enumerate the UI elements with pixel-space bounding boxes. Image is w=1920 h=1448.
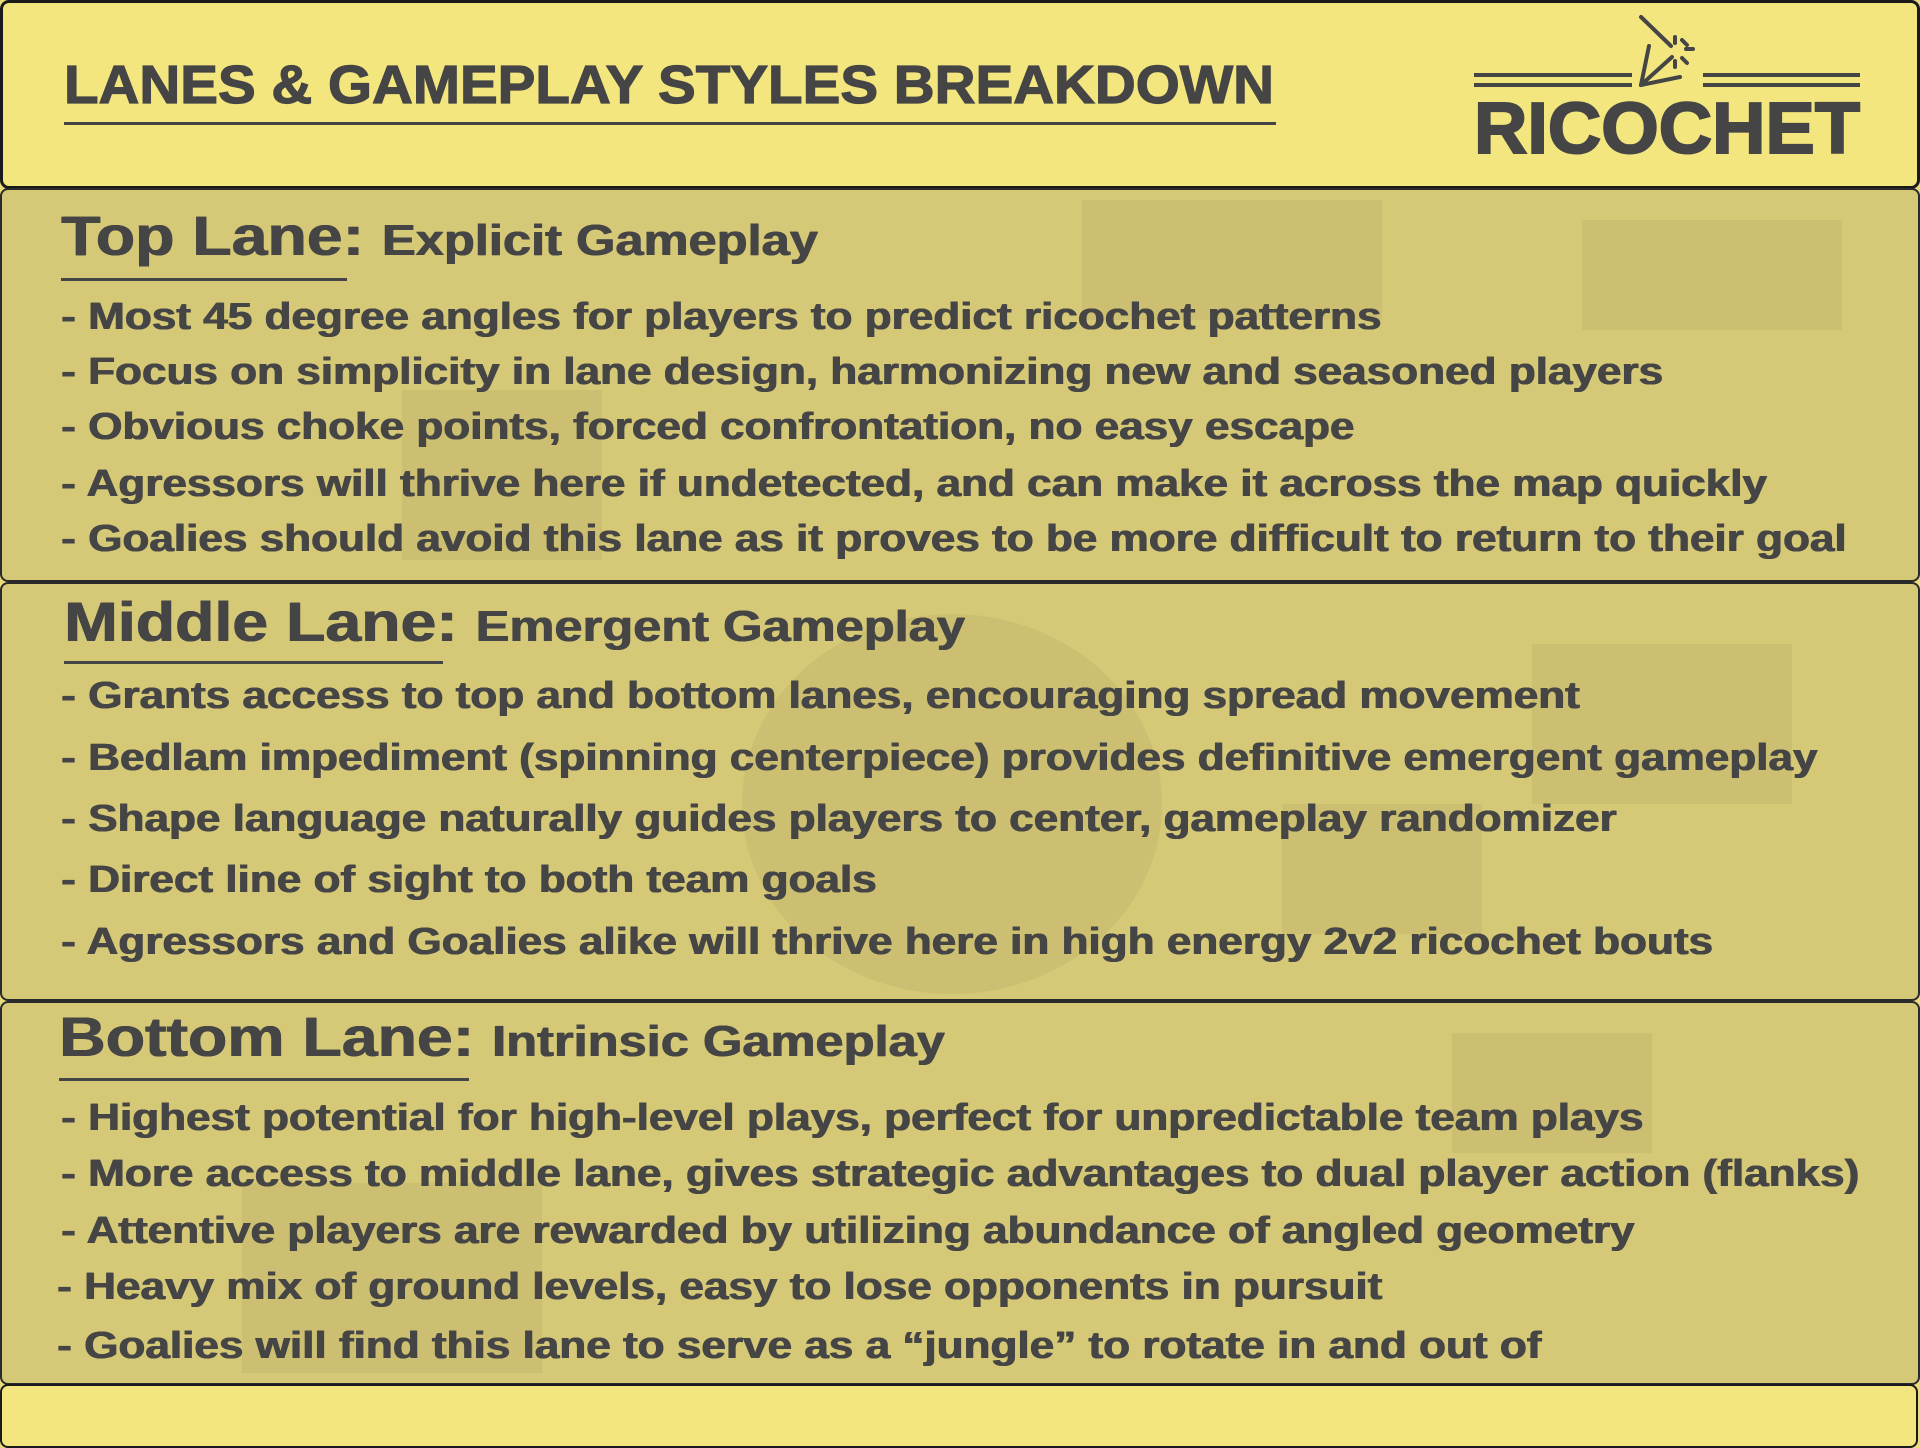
text block: middle lane bullets: - Bedlam impediment (spinning centerpiece) provides definitive emergent gameplay — [61, 737, 1817, 779]
text block: top lane bullets: - Agressors will thrive here if undetected, and can make it across the map quickly — [61, 463, 1767, 505]
panel: top lane — [0, 188, 1920, 582]
panel: bottom lane — [0, 1001, 1920, 1385]
title: LANES & GAMEPLAY STYLES BREAKDOWN — [64, 55, 1274, 115]
text block: top lane bullets: - Goalies should avoid this lane as it proves to be more difficult to return to their goal — [61, 518, 1846, 560]
text block: bottom lane bullets — [57, 1097, 1859, 1367]
text block: bottom lane bullets: - More access to middle lane, gives strategic advantages to dual player action (flanks) — [61, 1153, 1859, 1195]
text block: top lane bullets: - Focus on simplicity in lane design, harmonizing new and seasoned players — [61, 351, 1663, 393]
header — [0, 0, 1920, 189]
text block: bottom lane bullets: - Highest potential for high-level plays, perfect for unpredictable team plays — [61, 1097, 1643, 1139]
heading: middle lane: Middle Lane: Emergent Gameplay — [64, 590, 965, 653]
text block: top lane bullets: - Obvious choke points, forced confrontation, no easy escape — [61, 406, 1354, 448]
footer bar — [0, 1384, 1918, 1448]
heading: bottom lane: Bottom Lane: Intrinsic Gameplay — [59, 1005, 945, 1068]
text block: bottom lane bullets: - Heavy mix of ground levels, easy to lose opponents in pursuit — [57, 1266, 1382, 1308]
text block: middle lane bullets: - Grants access to top and bottom lanes, encouraging spread movement — [61, 675, 1580, 717]
text block: top lane bullets — [61, 296, 1846, 560]
text block: middle lane bullets: - Shape language naturally guides players to center, gameplay randomizer — [61, 798, 1617, 840]
text block: middle lane bullets: - Direct line of sight to both team goals — [61, 859, 877, 901]
text block: top lane bullets: - Most 45 degree angles for players to predict ricochet patterns — [61, 296, 1381, 338]
logo: ricochet — [1474, 14, 1860, 169]
text block: middle lane bullets — [61, 675, 1818, 963]
logo: ricochet: RICOCHET — [1474, 89, 1860, 169]
text block: middle lane bullets: - Agressors and Goalies alike will thrive here in high energy 2v2 ricochet bouts — [61, 921, 1713, 963]
text block: bottom lane bullets: - Goalies will find this lane to serve as a “jungle” to rotate in and out of — [57, 1325, 1541, 1367]
heading: top lane: Top Lane: Explicit Gameplay — [61, 204, 818, 267]
panel: middle lane — [0, 582, 1920, 1001]
text block: bottom lane bullets: - Attentive players are rewarded by utilizing abundance of angled geometry — [61, 1210, 1634, 1252]
